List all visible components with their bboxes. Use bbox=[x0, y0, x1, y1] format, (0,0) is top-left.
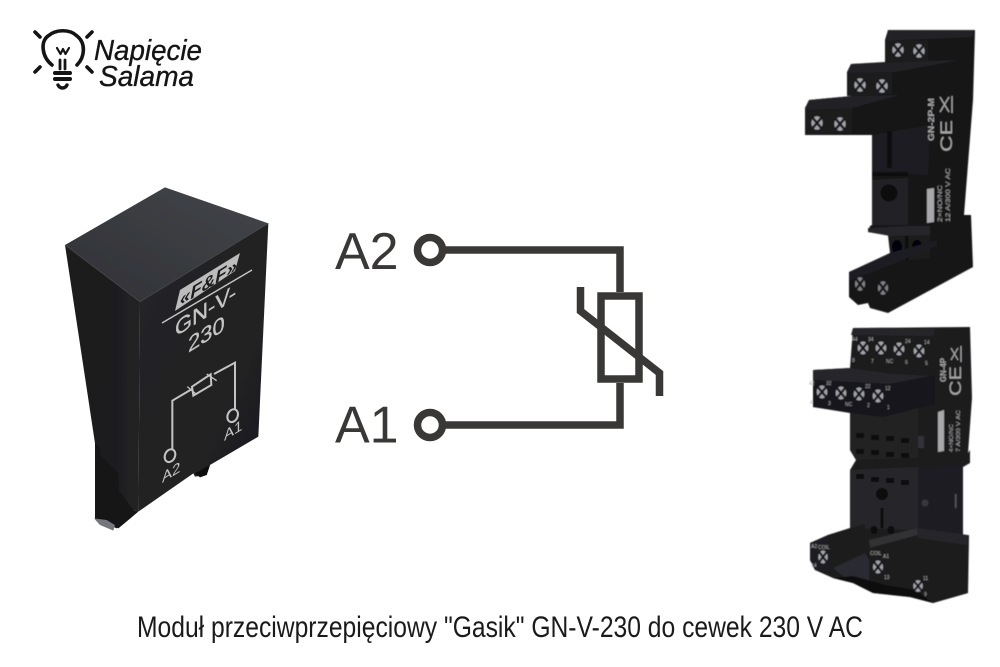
logo wordmark bbox=[94, 35, 202, 93]
socket markings: 7 bbox=[871, 359, 874, 365]
caption: Moduł przeciwprzepięciowy "Gasik" GN-V-230 do cewek 230 V AC bbox=[137, 611, 863, 644]
socket markings: CE bbox=[946, 366, 965, 396]
socket markings: 11 bbox=[923, 576, 928, 582]
module terminal labels: A2 bbox=[162, 459, 180, 487]
socket markings: GN-4P bbox=[939, 357, 948, 382]
bracket bbox=[810, 524, 968, 603]
socket markings bbox=[927, 96, 956, 223]
product: relay socket GN-4P bbox=[809, 327, 972, 603]
socket body bbox=[810, 327, 972, 603]
socket body bbox=[805, 30, 975, 313]
socket markings: 14 bbox=[924, 340, 930, 346]
socket markings: CE bbox=[937, 120, 956, 152]
socket markings: 12 A/300 V AC bbox=[946, 167, 952, 222]
socket markings: 14 bbox=[811, 563, 817, 569]
socket markings: 2×NO/NC bbox=[938, 184, 944, 222]
contact slots bbox=[856, 433, 909, 534]
varistor body bbox=[601, 296, 639, 379]
socket markings: A1 bbox=[883, 554, 889, 560]
socket markings: NC bbox=[886, 359, 894, 365]
socket centre bbox=[849, 125, 937, 281]
label A2: A2 bbox=[335, 223, 399, 281]
logo wordmark: Salama bbox=[99, 61, 194, 93]
product: surge module GN-V-230 bbox=[65, 187, 268, 531]
socket markings: 34 bbox=[868, 337, 874, 343]
socket markings: NC bbox=[845, 402, 853, 408]
socket markings bbox=[809, 337, 965, 598]
F&F logo badge: «F&F» bbox=[180, 255, 237, 310]
module label: 230 bbox=[188, 311, 225, 358]
socket markings: 4×NO/NC bbox=[949, 424, 955, 452]
socket markings: 3 bbox=[828, 401, 831, 407]
varistor slash bbox=[580, 287, 660, 396]
logo wordmark: Napięcie bbox=[94, 35, 202, 67]
module terminal labels bbox=[162, 417, 242, 487]
terminal A1 bbox=[418, 412, 442, 438]
socket markings: 4 bbox=[810, 400, 813, 406]
socket markings: COIL bbox=[818, 545, 830, 551]
socket markings: 5 bbox=[925, 361, 928, 367]
logo: Napięcie Salama bbox=[35, 31, 202, 93]
socket markings: A2 bbox=[811, 544, 817, 550]
socket markings: 8 bbox=[852, 358, 855, 364]
module circuit symbol bbox=[163, 363, 240, 464]
module label: GN-V- bbox=[175, 280, 236, 342]
terminal ridges bbox=[805, 30, 975, 110]
product: relay socket GN-2P-M bbox=[805, 30, 975, 313]
module terminal labels: A1 bbox=[224, 417, 242, 445]
module label bbox=[162, 270, 252, 358]
socket markings: 13 bbox=[884, 575, 890, 581]
socket markings: 22 bbox=[865, 384, 871, 390]
socket markings: 42 bbox=[809, 381, 815, 387]
upper socket bbox=[850, 408, 918, 460]
wires bbox=[445, 250, 620, 425]
terminal A2 bbox=[418, 238, 442, 262]
label A1: A1 bbox=[335, 396, 399, 454]
socket markings: 44 bbox=[852, 337, 858, 343]
terminal faces bbox=[805, 40, 928, 135]
socket markings: 1 bbox=[887, 405, 890, 411]
socket markings: GN-2P-M bbox=[927, 98, 936, 141]
socket markings: 9 bbox=[924, 592, 927, 598]
socket markings: 32 bbox=[826, 381, 832, 387]
icon: light bulb bbox=[35, 31, 92, 88]
circuit diagram: varistor bbox=[335, 223, 660, 454]
socket screws bbox=[810, 42, 926, 296]
socket markings: 12 bbox=[885, 386, 891, 392]
module body bbox=[65, 187, 268, 531]
lower socket bbox=[850, 467, 918, 530]
socket markings: 7 A/300 V AC bbox=[956, 410, 962, 452]
socket markings: COIL bbox=[870, 551, 882, 557]
socket markings: 6 bbox=[905, 360, 908, 366]
socket markings: 24 bbox=[905, 339, 911, 345]
upper terminal faces bbox=[813, 375, 935, 417]
socket screws bbox=[816, 340, 925, 593]
socket markings: 2 bbox=[867, 403, 870, 409]
terminal ridges bbox=[813, 328, 935, 384]
